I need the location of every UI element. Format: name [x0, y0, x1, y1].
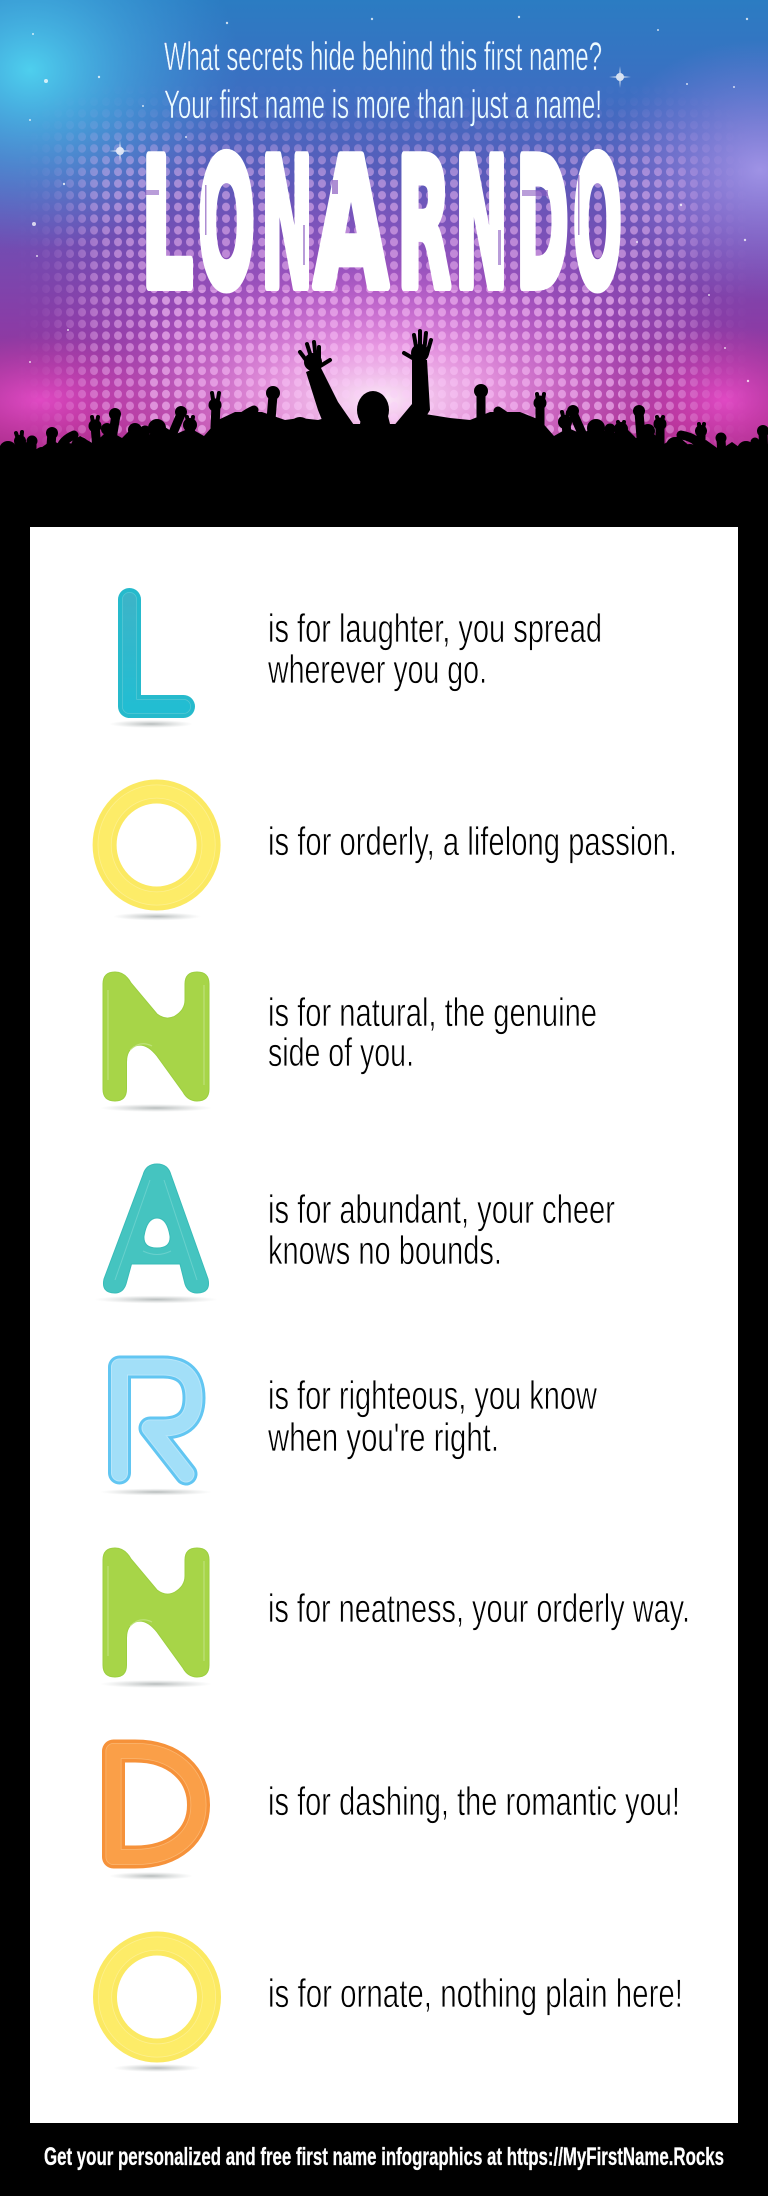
- text: A meaning: [268, 1188, 615, 1273]
- letter O row: [105, 792, 677, 920]
- title: LONARNDO: R: [397, 121, 451, 328]
- text: A meaning: knows no bounds.: [268, 1229, 502, 1273]
- text: L meaning: is for laughter, you spread: [268, 607, 602, 651]
- icon: letter D: [109, 1751, 198, 1880]
- icon: letter N: [100, 972, 212, 1112]
- text: R meaning: is for righteous, you know: [268, 1374, 597, 1418]
- title: LONARNDO: A: [314, 121, 388, 328]
- text: N meaning: [268, 991, 597, 1075]
- title: LONARNDO: O: [198, 121, 255, 328]
- text: O: [573, 121, 622, 328]
- text: N meaning: side of you.: [268, 1031, 414, 1075]
- icon: letter O: [105, 792, 209, 920]
- title: LONARNDO: [141, 121, 622, 328]
- letter N row: [100, 972, 597, 1112]
- icon: letter A: [94, 1164, 218, 1304]
- icon: letter L: [109, 600, 193, 728]
- title: LONARNDO: L: [141, 121, 193, 328]
- icon: letter N: [100, 1548, 212, 1688]
- letter N row 2: [100, 1548, 690, 1688]
- panel: white letter list: [30, 527, 738, 2123]
- title: LONARNDO: D: [516, 121, 569, 328]
- text: L meaning: [267, 607, 602, 692]
- letter A row: [94, 1164, 615, 1304]
- letter O row 2: [105, 1944, 683, 2072]
- title: LONARNDO: N: [261, 121, 313, 328]
- text: R meaning: [267, 1374, 597, 1460]
- icon: letter R: [100, 1367, 212, 1496]
- text: R meaning: when you're right.: [267, 1416, 499, 1460]
- text: A meaning: is for abundant, your cheer: [268, 1188, 615, 1232]
- title: LONARNDO: N: [455, 121, 508, 328]
- letter L row: [109, 600, 602, 728]
- header: stage background with lights: [0, 0, 768, 450]
- icon: letter O: [105, 1944, 209, 2072]
- crowd silhouette: [0, 331, 768, 530]
- text: N meaning: is for natural, the genuine: [268, 991, 597, 1035]
- text: L meaning: wherever you go.: [267, 648, 487, 692]
- letter R row: [100, 1367, 597, 1496]
- letter D row: [109, 1751, 680, 1880]
- heading: tagline lines: [164, 35, 602, 127]
